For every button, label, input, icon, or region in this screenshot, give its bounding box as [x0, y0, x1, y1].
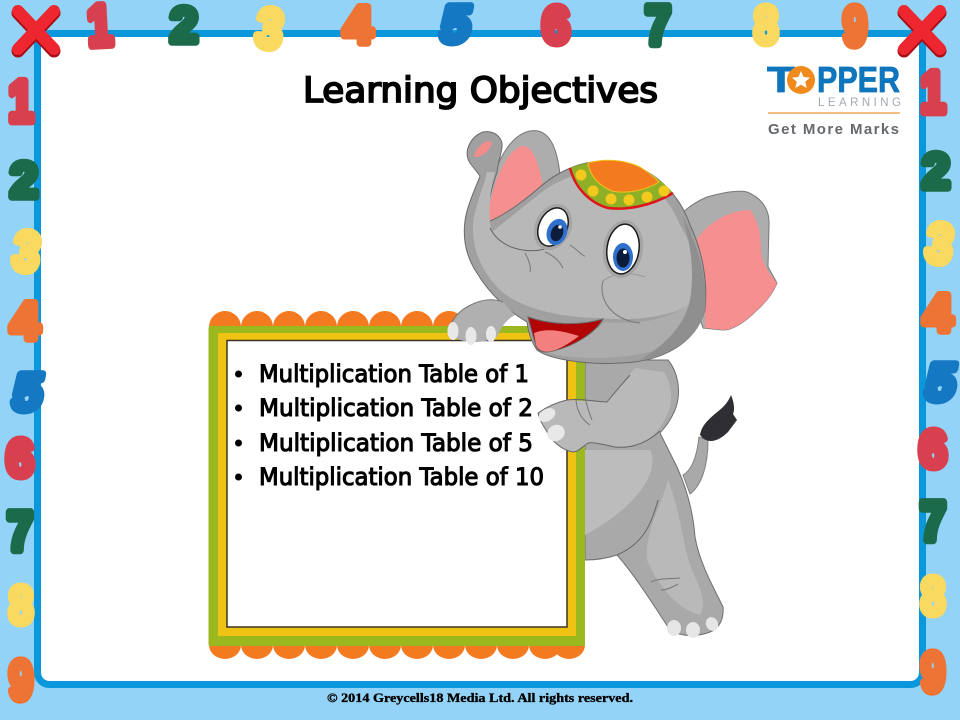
copyright footer: © 2014 Greycells18 Media Ltd. All rights reserved.	[327, 691, 633, 705]
left border numbers: 4	[11, 293, 40, 351]
board: green frame	[208, 326, 585, 646]
left border numbers: 2	[10, 153, 38, 208]
board: white panel	[227, 340, 567, 627]
icon: right red cross	[904, 11, 940, 51]
elephant paw on board	[448, 300, 515, 345]
objectives list: Multiplication Table of 5	[259, 429, 533, 457]
left border numbers: 8	[9, 577, 33, 635]
elephant right ear	[670, 191, 777, 330]
right border numbers: 9	[921, 643, 945, 703]
logo: Topper Learning: Get More Marks	[768, 121, 899, 138]
board: scalloped orange edges	[209, 311, 585, 659]
elephant left ear	[487, 131, 560, 240]
left border numbers: 3	[9, 219, 44, 284]
title: Learning Objectives	[303, 71, 658, 111]
icon: left red cross	[18, 11, 54, 51]
objectives list: Multiplication Table of 2	[259, 394, 533, 422]
objectives list	[235, 360, 544, 491]
elephant arm	[536, 368, 671, 452]
elephant right eye	[599, 217, 647, 281]
elephant body, leg and tail	[585, 360, 737, 638]
objectives list: Multiplication Table of 10	[259, 463, 544, 491]
elephant left eye	[527, 198, 579, 256]
right border numbers: 1	[921, 61, 945, 124]
left border numbers: 1	[9, 70, 33, 133]
logo: Topper Learning: LEARNING	[818, 97, 901, 109]
right border numbers: 3	[922, 211, 957, 276]
board: yellow frame	[218, 333, 576, 636]
left border numbers: 5	[8, 364, 48, 422]
right border numbers: 5	[921, 354, 960, 412]
left border numbers	[6, 70, 48, 711]
left border numbers: 9	[9, 651, 33, 711]
logo: Topper Learning: T	[767, 59, 795, 100]
left border numbers: 6	[6, 429, 34, 487]
elephant head and trunk	[464, 132, 706, 363]
right border numbers: 4	[924, 285, 953, 343]
right border numbers: 7	[920, 490, 946, 552]
right border numbers: 2	[922, 144, 950, 199]
right border numbers: 6	[919, 420, 947, 478]
right border numbers: 8	[921, 568, 945, 626]
logo: Topper Learning: PPER	[817, 59, 900, 100]
left border numbers: 7	[7, 500, 33, 562]
logo: Topper Learning	[767, 59, 901, 138]
right border numbers	[919, 61, 960, 703]
objectives list: Multiplication Table of 1	[259, 360, 529, 388]
top border numbers	[86, 0, 867, 61]
elephant mouth	[528, 317, 603, 352]
elephant cap	[570, 160, 673, 209]
